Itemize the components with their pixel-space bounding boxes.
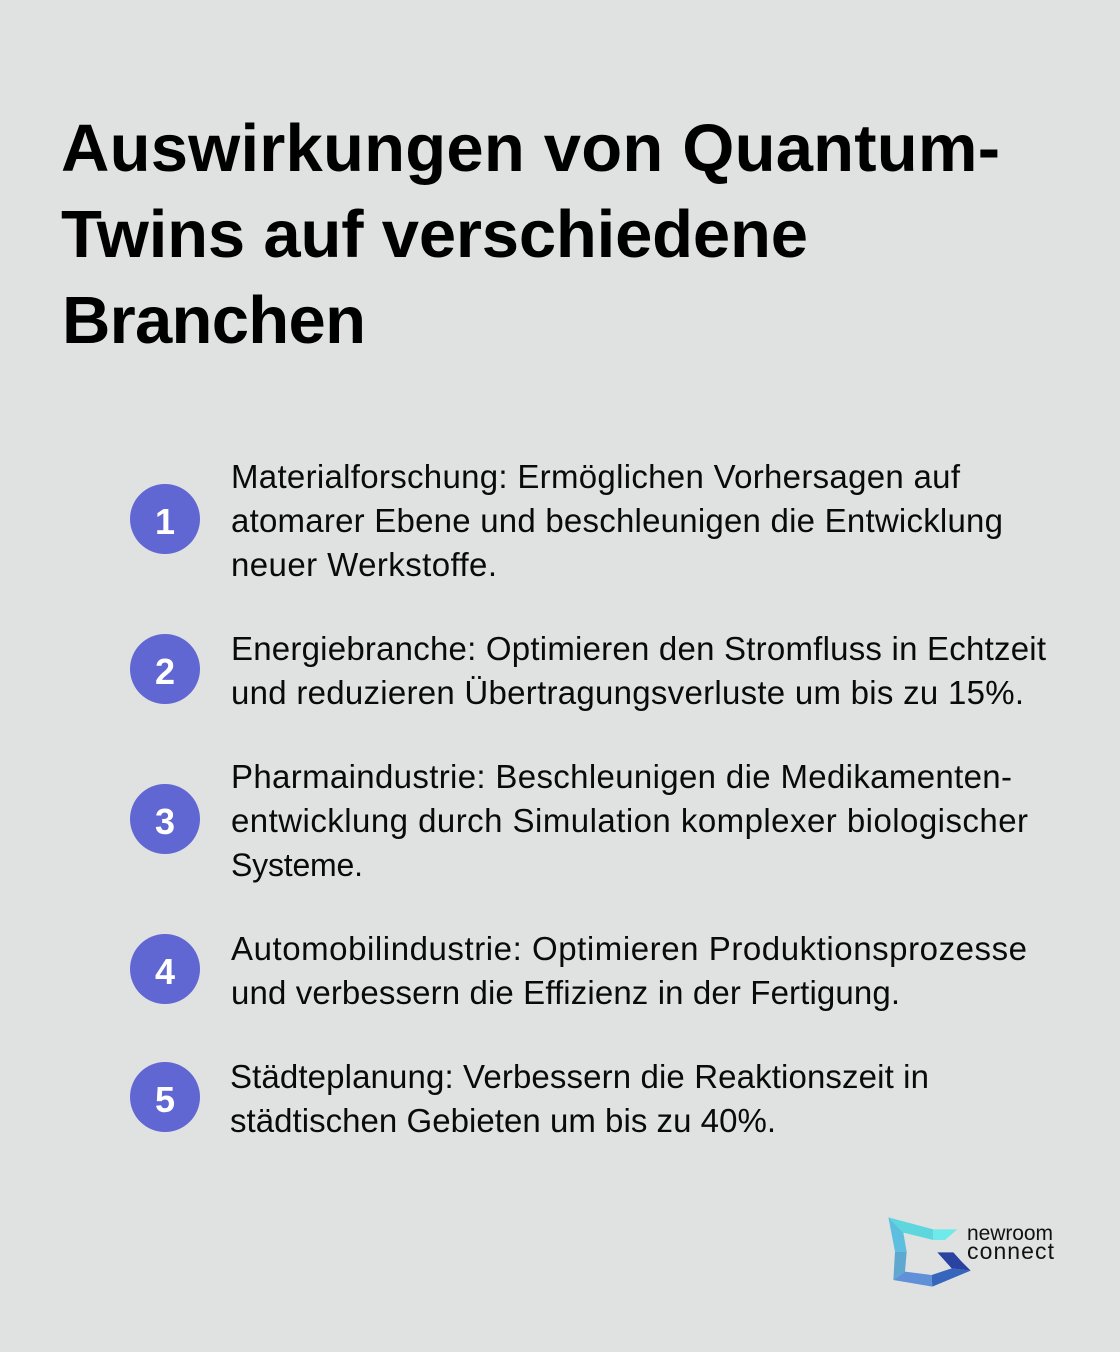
title: Auswirkungen von Quantum- xyxy=(61,111,1000,186)
list item 2: Energiebranche xyxy=(130,630,1046,711)
list item 3: Pharmaindustrie xyxy=(130,758,1028,883)
number badge 5: 5 xyxy=(155,1079,175,1120)
text: Pharmaindustrie: Systeme. xyxy=(231,847,363,883)
icon: logo mark xyxy=(888,1217,971,1287)
number badge 2: 2 xyxy=(155,651,175,692)
logo: newroom connect xyxy=(888,1217,1055,1287)
logo wordmark: newroom xyxy=(967,1222,1053,1245)
title: Branchen xyxy=(62,283,366,358)
list item 5: Städteplanung xyxy=(130,1058,929,1139)
number badge 4: 4 xyxy=(155,951,175,992)
number badge 4 xyxy=(130,934,200,1004)
title: Twins auf verschiedene xyxy=(61,197,808,272)
list item 4: Automobilindustrie xyxy=(130,930,1027,1011)
text: Pharmaindustrie: Pharmaindustrie: Beschleunigen die Medikamenten- xyxy=(231,758,1012,795)
text: Automobilindustrie: Automobilindustrie: Optimieren Produktionsprozesse xyxy=(231,930,1027,967)
text: Städteplanung: Städteplanung: Verbessern die Reaktionszeit in xyxy=(230,1058,929,1095)
number badge 3 xyxy=(130,784,200,854)
number badge 3: 3 xyxy=(155,801,175,842)
text: Materialforschung xyxy=(231,458,1003,583)
text: Pharmaindustrie xyxy=(231,758,1028,883)
text: Materialforschung: Materialforschung: Ermöglichen Vorhersagen auf xyxy=(231,458,961,495)
text: Städteplanung: städtischen Gebieten um bis zu 40%. xyxy=(230,1102,776,1139)
title xyxy=(61,111,1000,358)
text: Städteplanung xyxy=(230,1058,929,1139)
text: Energiebranche: und reduzieren Übertragungsverluste um bis zu 15%. xyxy=(231,674,1024,711)
logo wordmark: connect xyxy=(967,1238,1055,1264)
number badge 5 xyxy=(130,1062,200,1132)
text: Energiebranche: Energiebranche: Optimieren den Stromfluss in Echtzeit xyxy=(231,630,1046,667)
list item 1: Materialforschung xyxy=(130,458,1003,583)
logo wordmark xyxy=(967,1222,1055,1264)
number badge 2 xyxy=(130,634,200,704)
number badge 1 xyxy=(130,484,200,554)
text: Automobilindustrie xyxy=(231,930,1027,1011)
number badge 1: 1 xyxy=(155,501,175,542)
text: Pharmaindustrie: entwicklung durch Simulation komplexer biologischer xyxy=(231,802,1028,839)
text: Materialforschung: atomarer Ebene und beschleunigen die Entwicklung xyxy=(231,502,1003,539)
text: Energiebranche xyxy=(231,630,1046,711)
text: Materialforschung: neuer Werkstoffe. xyxy=(231,546,497,583)
text: Automobilindustrie: und verbessern die Effizienz in der Fertigung. xyxy=(231,974,900,1011)
